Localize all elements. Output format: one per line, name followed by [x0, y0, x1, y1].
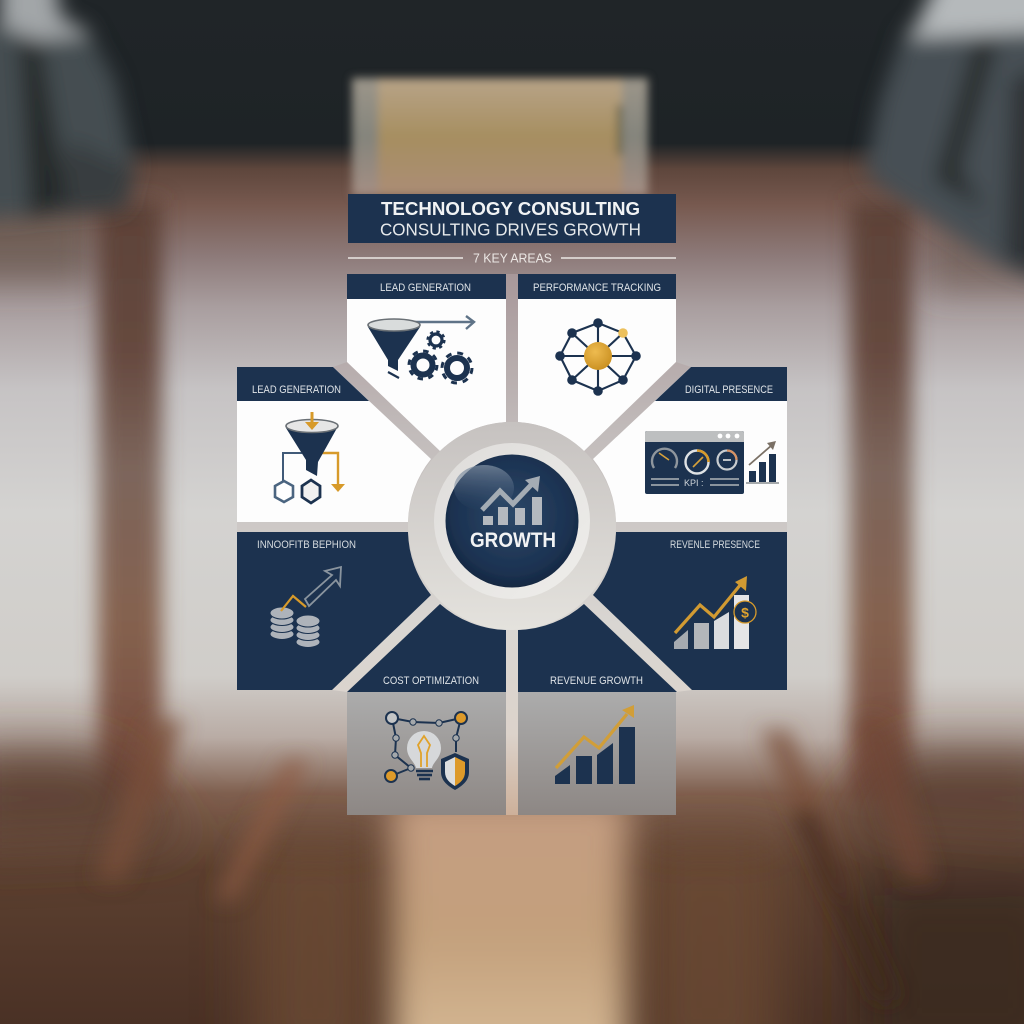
icon: KPI dashboard [645, 431, 779, 494]
central growth hub [408, 422, 616, 630]
icon: coin stacks and arrow [270, 567, 341, 648]
icon: revenue chart with dollar [674, 576, 756, 649]
icon: funnel with branches [275, 412, 345, 503]
panel: performance tracking [518, 274, 676, 451]
heading: lead generation: LEAD GENERATION [380, 282, 471, 294]
panel: revenue presence [593, 532, 787, 690]
icon: growth bars with arrow [555, 705, 635, 784]
heading: garbled revenue label: REVENLE PRESENCE [670, 539, 760, 551]
icon: network hub [555, 318, 641, 396]
panel backing and connectors [237, 274, 787, 815]
label: growth: GROWTH [470, 529, 556, 552]
panel: cost optimization [347, 604, 506, 815]
panel: lead generation top [347, 274, 506, 451]
panel: innovation left [237, 532, 431, 690]
icon: bulb, shield and circuit [385, 712, 469, 790]
heading: revenue growth: REVENUE GROWTH [550, 675, 643, 687]
icon: funnel and gears [368, 316, 474, 383]
heading: performance tracking: PERFORMANCE TRACKING [533, 282, 661, 294]
heading: cost optimization: COST OPTIMIZATION [383, 675, 479, 687]
panel: lead generation left [237, 367, 431, 522]
heading: garbled innovation label: INNOOFITB BEPHION [257, 539, 356, 551]
icon: revenue chart with dollar: $ [741, 604, 749, 620]
title banner: CONSULTING DRIVES GROWTH [380, 220, 641, 240]
icon: growth chart [482, 476, 542, 525]
icon: KPI dashboard: KPI : [684, 478, 704, 488]
panel: revenue growth [518, 604, 677, 815]
heading: lead generation left: LEAD GENERATION [252, 384, 341, 396]
title banner [348, 194, 676, 243]
heading: digital presence: DIGITAL PRESENCE [685, 384, 773, 396]
subtitle: 7 key areas: 7 KEY AREAS [473, 252, 552, 266]
panel: digital presence [593, 367, 787, 522]
title banner: TECHNOLOGY CONSULTING [381, 198, 640, 219]
